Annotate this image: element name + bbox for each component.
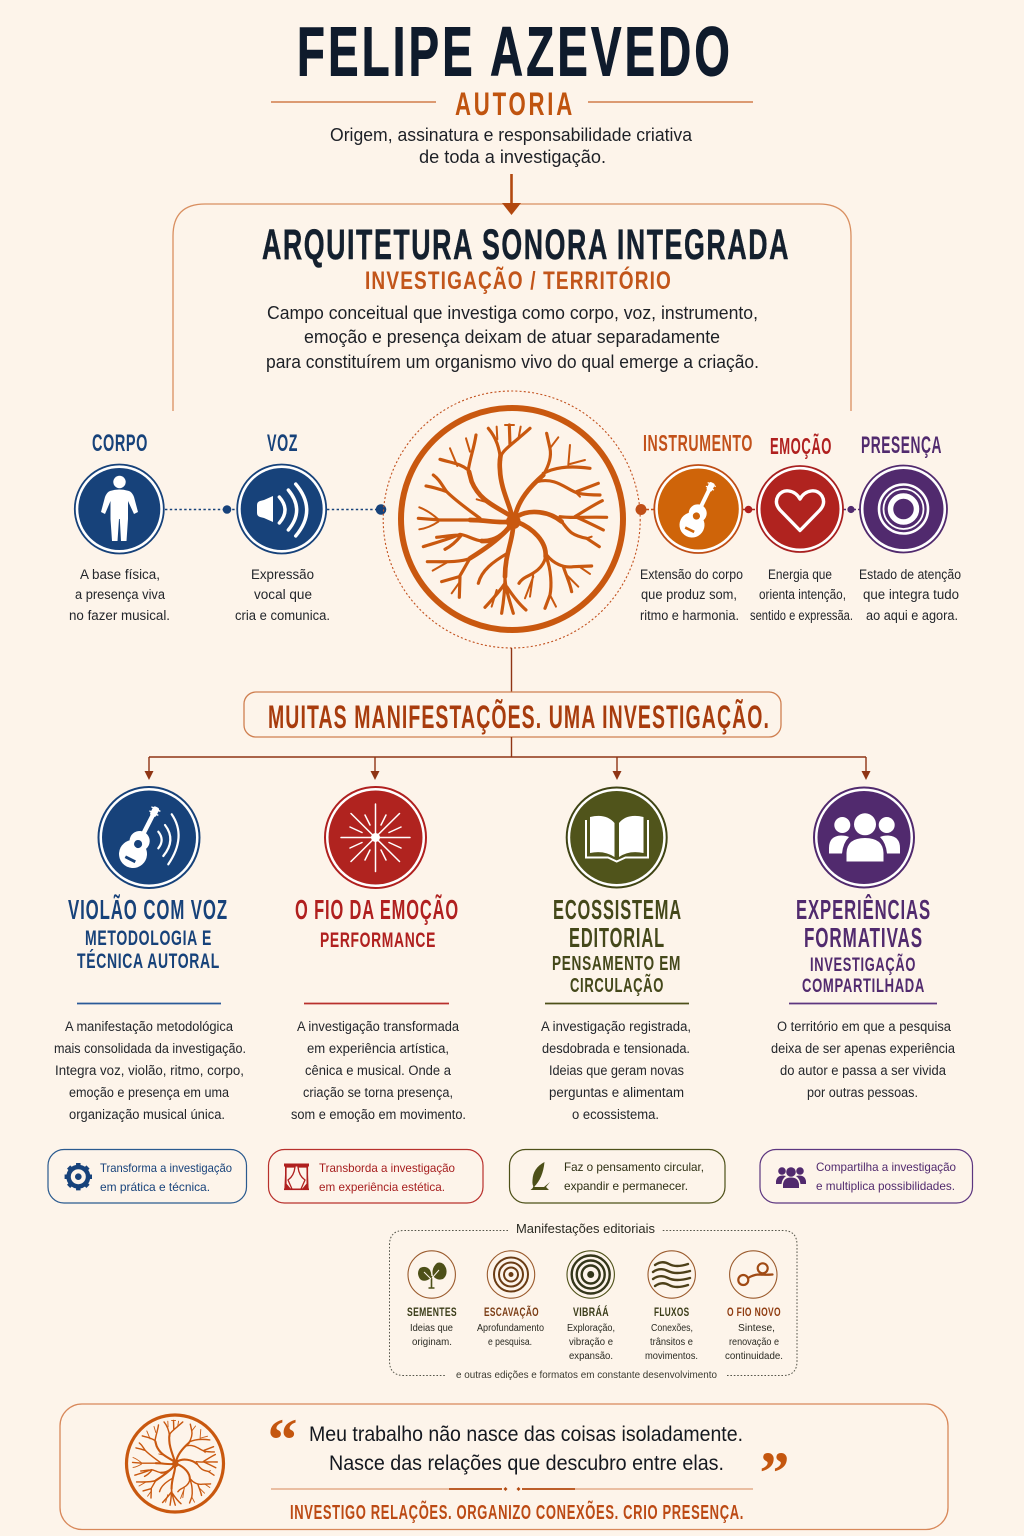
column: corpo <box>69 430 170 623</box>
text block: origem: de toda a investigação. <box>419 147 606 167</box>
caption: outras edições: e outras edições e formatos em constante desenvolvimento <box>456 1369 717 1381</box>
panel: o fio da emoção: O FIO DA EMOÇÃO <box>295 894 459 925</box>
text block: ecossistema editorial: perguntas e alimentam <box>549 1085 684 1100</box>
card: transborda: em experiência estética. <box>319 1180 445 1194</box>
item: fluxos <box>645 1251 698 1362</box>
connector: navy dotted line <box>165 504 386 515</box>
column: emoção: EMOÇÃO <box>770 432 832 459</box>
panel: violão com voz: TÉCNICA AUTORAL <box>77 950 220 973</box>
card: faz o pensamento circular: Faz o pensamento circular, <box>564 1160 704 1174</box>
item: vibráá: Exploração, <box>567 1323 615 1334</box>
icon: body <box>75 464 164 554</box>
text block: campo conceitual: Campo conceitual que investiga como corpo, voz, instrumento, <box>267 303 758 323</box>
column: instrumento: ritmo e harmonia. <box>640 608 739 623</box>
item: vibráá: VIBRÁÁ <box>573 1304 609 1319</box>
text block: experiências formativas: por outras pessoas. <box>807 1085 918 1100</box>
text block: violão com voz <box>54 1019 246 1122</box>
panel: violão com voz <box>54 787 246 1122</box>
item: escavação: ESCAVAÇÃO <box>484 1304 539 1319</box>
panel: ecossistema editorial: PENSAMENTO EM <box>552 953 681 975</box>
text block: ecossistema editorial: o ecossistema. <box>572 1107 659 1122</box>
icon: guitar with sound waves <box>98 787 200 888</box>
card: faz o pensamento circular <box>510 1150 725 1203</box>
text block: experiências formativas <box>771 1019 955 1100</box>
text block: ecossistema editorial: A investigação registrada, <box>541 1019 691 1034</box>
card: compartilha: Compartilha a investigação <box>816 1160 956 1174</box>
banner: muitas manifestações <box>244 692 781 737</box>
item: escavação: Aprofundamento <box>477 1323 544 1334</box>
text block: o fio da emoção: som e emoção em movimento. <box>291 1107 466 1122</box>
column: corpo: no fazer musical. <box>69 608 170 623</box>
heading: manifestações editoriais: Manifestações editoriais <box>516 1221 655 1236</box>
column: presença: que integra tudo <box>863 587 959 602</box>
text block: o fio da emoção: criação se torna presença, <box>303 1085 453 1100</box>
connector: warm dotted line <box>636 504 860 515</box>
column: instrumento: Extensão do corpo <box>640 567 743 582</box>
column: voz: Expressão <box>251 567 314 582</box>
panel: experiências formativas: INVESTIGAÇÃO <box>810 954 916 976</box>
icon: target rings <box>860 466 947 552</box>
card: transforma: em prática e técnica. <box>100 1180 210 1194</box>
quote marks <box>268 1407 790 1506</box>
card: transforma <box>48 1150 246 1203</box>
item: sementes: originam. <box>412 1337 452 1348</box>
text block: o fio da emoção: em experiência artística, <box>307 1041 449 1056</box>
item: vibráá <box>567 1251 615 1362</box>
divider with diamonds <box>271 1485 753 1493</box>
text block: campo conceitual: para constituírem um organismo vivo do qual emerge a criação. <box>266 352 759 372</box>
item: o fio novo: O FIO NOVO <box>727 1305 781 1319</box>
text block: violão com voz: Integra voz, violão, ritmo, corpo, <box>55 1063 244 1078</box>
connector: tree to banner <box>510 648 512 692</box>
item: o fio novo: continuidade. <box>725 1351 783 1362</box>
icon: theatre curtain <box>284 1164 309 1190</box>
column: voz <box>235 430 330 623</box>
subtitle: autoria: AUTORIA <box>455 86 575 122</box>
quote marks: “ <box>268 1407 298 1473</box>
text block: campo conceitual: emoção e presença deixam de atuar separadamente <box>304 327 720 347</box>
emblem: small tree <box>126 1415 224 1512</box>
column: voz: cria e comunica. <box>235 608 330 623</box>
column: instrumento: INSTRUMENTO <box>643 430 753 456</box>
text block: origem: Origem, assinatura e responsabilidade criativa <box>330 125 693 145</box>
column: emoção: orienta intenção, <box>759 587 846 602</box>
item: fluxos: Conexões, <box>651 1323 693 1334</box>
column: emoção: sentido e expressãa. <box>750 608 853 623</box>
title: FELIPE AZEVEDO <box>297 12 733 90</box>
column: instrumento: que produz som, <box>641 587 737 602</box>
item: sementes: SEMENTES <box>407 1305 457 1319</box>
column: emoção: Energia que <box>768 567 832 582</box>
text block: o fio da emoção: cênica e musical. Onde a <box>305 1063 451 1078</box>
text block: ecossistema editorial: Ideias que geram novas <box>549 1063 684 1078</box>
card: compartilha <box>760 1150 972 1203</box>
text block: experiências formativas: O território em que a pesquisa <box>777 1019 951 1034</box>
panel: o fio da emoção: PERFORMANCE <box>320 929 436 952</box>
column: emoção <box>750 432 853 623</box>
item: fluxos: movimentos. <box>645 1351 698 1362</box>
subheading: investigação território: INVESTIGAÇÃO / TERRITÓRIO <box>365 265 672 295</box>
column: instrumento <box>640 430 753 623</box>
item: fluxos: FLUXOS <box>654 1305 690 1319</box>
card: transforma: Transforma a investigação <box>100 1161 232 1175</box>
icon: quill <box>530 1162 550 1190</box>
panel: ecossistema editorial: CIRCULAÇÃO <box>570 974 664 997</box>
panel frame: investigação <box>173 204 851 411</box>
item: escavação: e pesquisa. <box>488 1337 532 1348</box>
item: o fio novo: renovação e <box>729 1337 779 1348</box>
panel: violão com voz: METODOLOGIA E <box>85 927 212 950</box>
text block: ecossistema editorial <box>541 1019 691 1122</box>
column: corpo: A base física, <box>80 567 160 582</box>
column: presença: ao aqui e agora. <box>866 608 958 623</box>
icon: starburst <box>325 787 426 888</box>
panel: experiências formativas: COMPARTILHADA <box>802 976 925 997</box>
column: voz: VOZ <box>267 430 298 457</box>
text block: campo conceitual <box>266 303 759 372</box>
column: corpo: a presença viva <box>75 587 165 602</box>
quote text: Nasce das relações que descubro entre elas. <box>329 1452 724 1475</box>
panel: experiências formativas <box>771 788 955 1100</box>
text block: ecossistema editorial: desdobrada e tensionada. <box>542 1041 690 1056</box>
item: vibráá: expansão. <box>569 1351 613 1362</box>
column: corpo: CORPO <box>92 430 148 457</box>
card: transborda: Transborda a investigação <box>319 1161 455 1175</box>
text block: violão com voz: organização musical única. <box>69 1107 225 1122</box>
item: o fio novo: Sintese, <box>738 1323 775 1334</box>
text block: violão com voz: mais consolidada da investigação. <box>54 1041 246 1056</box>
panel: violão com voz: VIOLÃO COM VOZ <box>68 894 228 925</box>
text block: experiências formativas: do autor e passa a ser vivida <box>780 1063 946 1078</box>
icon: heart <box>757 466 843 552</box>
column: presença <box>859 432 961 623</box>
panel: quote <box>60 1404 948 1530</box>
icon: guitar <box>654 465 742 553</box>
panel: ecossistema editorial <box>541 788 691 1122</box>
item: fluxos: trânsitos e <box>650 1337 693 1348</box>
panel: experiências formativas: EXPERIÊNCIAS <box>796 894 931 925</box>
quote marks: ” <box>760 1440 790 1506</box>
icon: open book <box>567 788 667 888</box>
quote text <box>309 1423 743 1475</box>
panel: ecossistema editorial: ECOSSISTEMA <box>553 894 682 925</box>
column: presença: Estado de atenção <box>859 567 961 582</box>
arrow: autoria to investigação <box>502 174 521 215</box>
icon: gear <box>65 1163 92 1190</box>
item: vibráá: vibração e <box>569 1337 613 1348</box>
quote text: Meu trabalho não nasce das coisas isoladamente. <box>309 1423 743 1446</box>
item: sementes: Ideias que <box>410 1323 453 1334</box>
icon: speaker <box>237 464 326 554</box>
item: escavação <box>477 1251 544 1348</box>
icon: people group <box>814 788 914 888</box>
column: voz: vocal que <box>254 587 312 602</box>
icon: people <box>776 1167 806 1188</box>
tagline: INVESTIGO RELAÇÕES. ORGANIZO CONEXÕES. CRIO PRESENÇA. <box>290 1500 744 1524</box>
text block: o fio da emoção <box>291 1019 466 1122</box>
column: presença: PRESENÇA <box>861 432 942 459</box>
item: o fio novo <box>725 1251 783 1362</box>
text block: origem <box>330 125 693 167</box>
central tree emblem <box>383 391 640 648</box>
card: compartilha: e multiplica possibilidades. <box>816 1179 955 1193</box>
item: sementes <box>407 1251 457 1348</box>
card: faz o pensamento circular: expandir e permanecer. <box>564 1179 688 1193</box>
text block: violão com voz: A manifestação metodológica <box>65 1019 233 1034</box>
arrows: banner to four manifestations <box>144 737 870 780</box>
card: transborda <box>268 1150 483 1203</box>
text block: violão com voz: emoção e presença em uma <box>69 1085 229 1100</box>
panel: o fio da emoção <box>291 787 466 1122</box>
panel: manifestações editoriais <box>390 1221 797 1381</box>
panel: experiências formativas: FORMATIVAS <box>804 922 923 953</box>
panel: ecossistema editorial: EDITORIAL <box>569 922 665 953</box>
text block: o fio da emoção: A investigação transformada <box>297 1019 459 1034</box>
text block: experiências formativas: deixa de ser apenas experiência <box>771 1041 955 1056</box>
